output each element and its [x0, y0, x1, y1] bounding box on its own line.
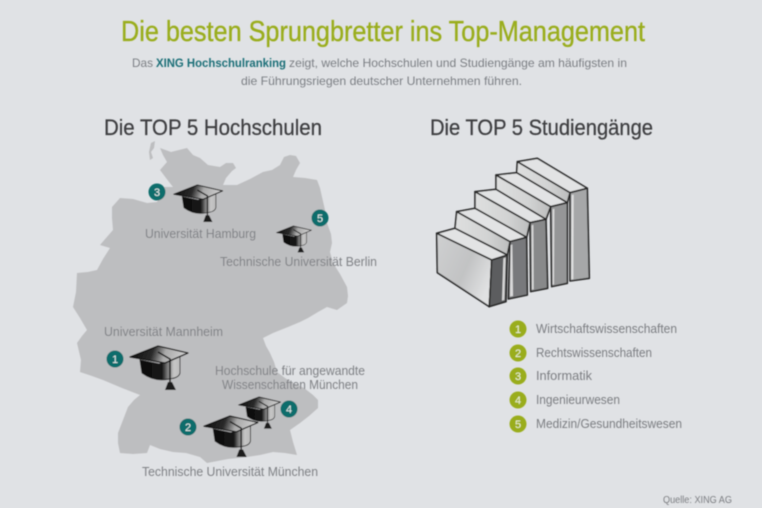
icon: graduation cap Mannheim — [130, 346, 188, 390]
legend item 1: 1 — [515, 324, 521, 336]
marker 1: 1 — [112, 354, 118, 366]
legend item 1: Wirtschaftswissenschaften — [536, 322, 677, 336]
legend item 2: 2 — [515, 348, 521, 360]
legend item 2 — [510, 344, 652, 362]
label: Technische Universität München: Technische Universität München — [142, 465, 318, 479]
marker 2 — [180, 418, 196, 436]
label: Hochschule für angewandte Wissenschaften München: Wissenschaften München — [222, 378, 358, 392]
heading: Hochschulen: Die TOP 5 Hochschulen — [104, 115, 322, 140]
intro text: Das — [132, 56, 153, 70]
heading: Studiengänge: Die TOP 5 Studiengänge — [430, 115, 653, 140]
intro text: die Führungsriegen deutscher Unternehmen führen. — [241, 74, 522, 88]
legend item 5: Medizin/Gesundheitswesen — [536, 417, 682, 431]
marker 1 — [106, 350, 124, 368]
legend item 1 — [510, 320, 677, 338]
marker 4 — [280, 400, 298, 418]
legend item 5: 5 — [515, 419, 521, 431]
marker 5 — [312, 210, 328, 226]
legend item 4 — [510, 392, 620, 408]
illustration: stack of five books — [437, 158, 589, 307]
legend: Studiengänge ranking — [510, 320, 682, 432]
label: Hochschule für angewandte Wissenschaften München: Hochschule für angewandte — [215, 364, 365, 378]
legend item 4: Ingenieurwesen — [536, 393, 620, 407]
source note: Quelle: XING AG — [663, 495, 732, 506]
map of Germany — [73, 141, 348, 463]
label: Universität Mannheim: Universität Mannheim — [104, 325, 223, 339]
label: Technische Universität Berlin: Technische Universität Berlin — [220, 255, 377, 269]
legend item 5 — [510, 416, 682, 432]
label: Hochschule für angewandte Wissenschaften München — [215, 364, 365, 392]
marker 3 — [148, 184, 166, 200]
intro text: zeigt, welche Hochschulen und Studiengänge am häufigsten in — [289, 56, 627, 70]
legend item 2: Rechtswissenschaften — [536, 346, 652, 360]
legend item 3: Informatik — [536, 369, 593, 383]
marker 2: 2 — [185, 422, 191, 434]
intro text — [132, 56, 627, 88]
icon: graduation cap München 4 — [239, 397, 280, 429]
label: Universität Hamburg: Universität Hamburg — [145, 227, 256, 241]
marker 3: 3 — [154, 187, 160, 199]
legend item 4: 4 — [515, 395, 521, 407]
legend item 3: 3 — [515, 371, 521, 383]
legend item 3 — [510, 368, 593, 384]
marker 4: 4 — [286, 404, 292, 416]
intro text: XING Hochschulranking — [156, 56, 286, 70]
title: Die besten Sprungbretter ins Top-Management — [121, 16, 645, 48]
icon: graduation cap München 2 — [204, 416, 258, 457]
icon: graduation cap Berlin — [277, 226, 311, 252]
icon: graduation cap Hamburg — [174, 185, 223, 222]
marker 5: 5 — [317, 213, 323, 225]
